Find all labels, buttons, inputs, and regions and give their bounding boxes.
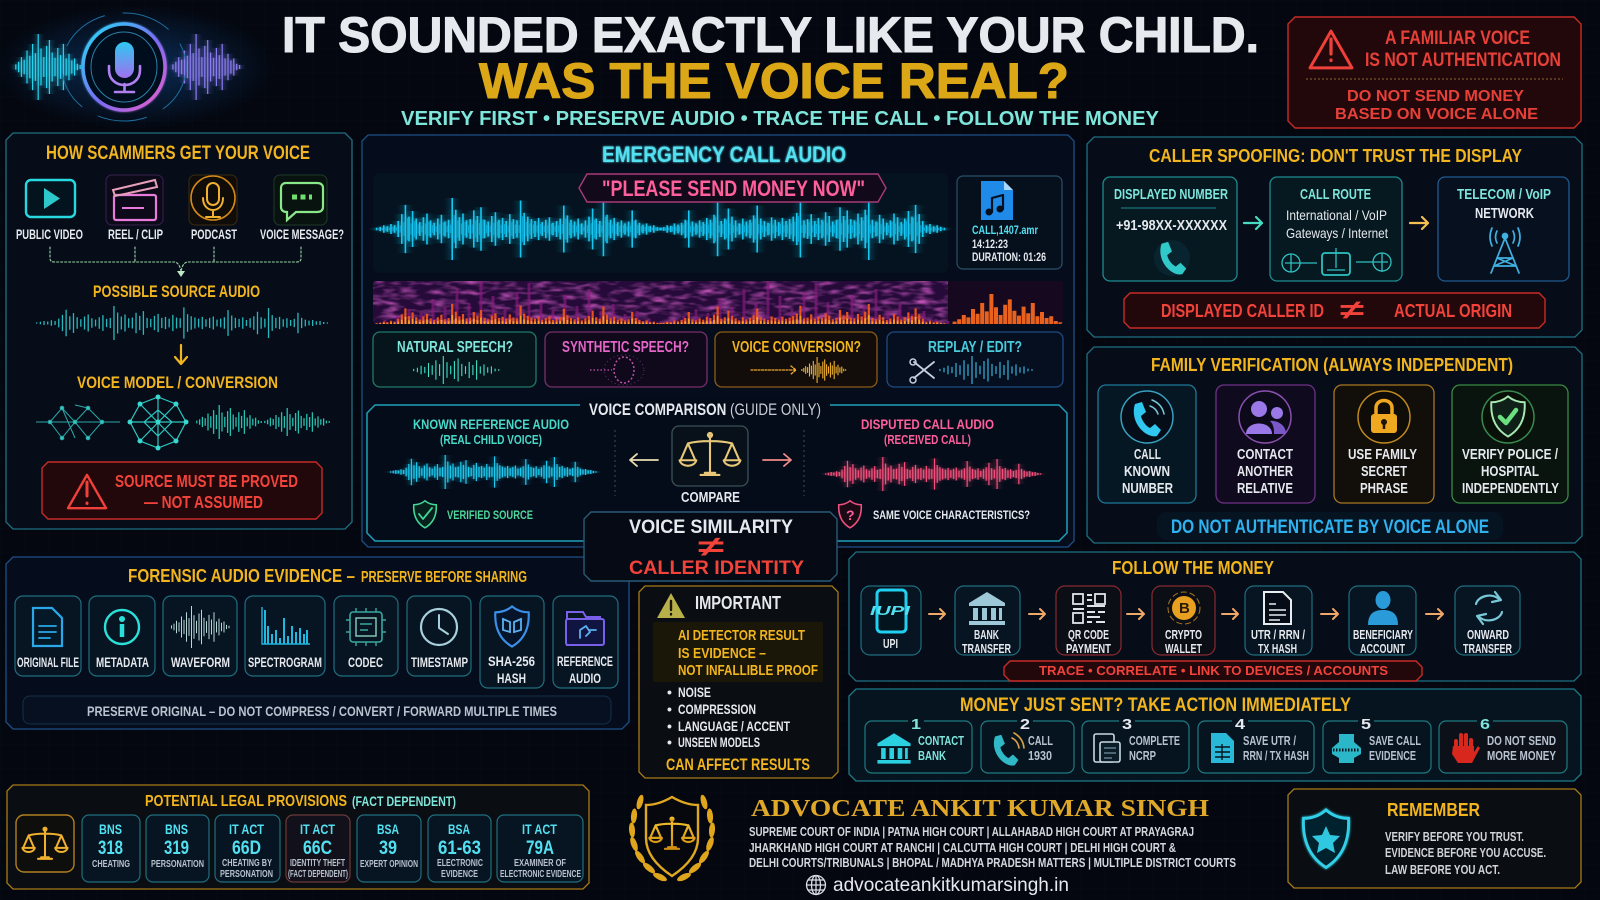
card: BNS 319: 319 [164,838,189,859]
step: crypto wallet [1152,586,1215,656]
warning text: DO NOT SEND MONEY [1347,88,1524,105]
card: spectrogram [245,596,325,676]
maxims [1385,830,1546,877]
card: reference audio: AUDIO [569,670,601,686]
label: possible source audio: POSSIBLE SOURCE AUDIO [93,283,260,301]
name: ADVOCATE ANKIT KUMAR SINGH [751,796,1209,822]
converted waveform tail [265,408,329,436]
card: waveform [163,596,237,676]
warning text: A FAMILIAR VOICE [1385,28,1530,49]
card: IT Act 66D: PERSONATION [220,869,273,880]
icon: neural network chain [36,405,120,440]
card: telecom network [1438,177,1569,281]
step: UPI [861,586,921,655]
known reference label [413,416,569,447]
factors list: UNSEEN MODELS [678,734,760,750]
same voice characteristics [839,501,1030,528]
step: QR code: QR CODE [1068,627,1109,642]
warning mark [86,482,88,504]
banner: do not authenticate: DO NOT AUTHENTICATE BY VOICE ALONE [1171,517,1489,538]
action 5: save call evidence: EVIDENCE [1369,748,1416,763]
card: BSA 61-63 [428,815,491,882]
step: onward transfer: TRANSFER [1463,641,1512,656]
card: call route: International / VoIP [1286,207,1387,223]
card: contact another relative: RELATIVE [1237,481,1293,497]
card: reference audio [553,596,618,688]
heading text: VOICE COMPARISON (GUIDE ONLY) [589,401,821,419]
quote pill: "PLEASE SEND MONEY NOW" [602,176,865,201]
factors list: • [667,718,672,734]
card: call known number: KNOWN [1124,464,1170,480]
heading: CALLER SPOOFING: DON'T TRUST THE DISPLAY [1149,145,1523,166]
arrow: left [630,454,658,466]
arrow [1426,609,1443,619]
action 1: contact bank: 1 [911,716,921,733]
panel: how scammers get your voice [6,133,352,529]
card: IT Act 66D: IT ACT [229,821,264,837]
step: crypto wallet: B [1179,600,1190,617]
source labels: PUBLIC VIDEO [16,226,83,242]
factors list: COMPRESSION [678,701,756,717]
card: reference audio: REFERENCE [557,653,613,669]
action 5: save call evidence: SAVE CALL [1369,733,1421,748]
card: natural speech: NATURAL SPEECH? [397,339,513,356]
card: displayed number: +91-98XX-XXXXXX [1116,217,1227,234]
action 6: do not send more [1439,716,1567,773]
chart: source waveform [37,306,327,340]
advocate emblem [628,794,716,883]
card: family secret phrase: SECRET [1361,464,1407,480]
card: verify independently: INDEPENDENTLY [1462,481,1559,497]
action 3: complete NCRP: COMPLETE [1129,733,1180,748]
maxims: VERIFY BEFORE YOU TRUST. [1385,830,1524,844]
banner: preserve original: PRESERVE ORIGINAL – DO NOT COMPRESS / CONVERT / FORWARD MULTIPLE TIMES [87,703,557,719]
warning text [1335,28,1561,123]
card: voice conversion [715,332,877,387]
chart: spectrogram [373,281,1063,324]
known reference label: KNOWN REFERENCE AUDIO [413,416,569,432]
factors list: • [667,734,672,750]
card: telecom network: TELECOM / VoIP [1457,187,1551,203]
card: BNS 319: PERSONATION [151,859,204,870]
panel: emergency call audio [362,135,1074,547]
callout: familiar voice warning [1288,17,1581,128]
arrowhead [177,271,185,277]
card: original file: ORIGINAL FILE [17,655,79,670]
chart: main waveform [373,173,948,273]
card: timestamp [407,596,471,676]
source labels [16,226,344,242]
card: family secret phrase: PHRASE [1360,481,1408,497]
card: BNS 319 [146,815,209,882]
title [282,7,1259,130]
icon: globe [806,876,826,894]
card: BSA 39: BSA [377,821,399,837]
card: BSA 61-63: ELECTRONIC [437,858,483,869]
step: UTR RRN TX hash [1245,586,1312,656]
card: synthetic speech [545,332,707,387]
step: bank transfer [955,586,1020,656]
heading: IMPORTANT [695,593,781,613]
action 3: complete NCRP: 3 [1122,716,1132,733]
card: BSA 61-63: 61-63 [438,838,481,859]
divider [615,430,804,496]
card: voice conversion: VOICE CONVERSION? [732,339,861,356]
heading [580,398,830,420]
action 6: do not send more: 6 [1480,716,1490,733]
card: call route: CALL ROUTE [1300,187,1371,203]
card: call route: Gateways / Internet [1286,225,1388,241]
step: bank transfer: BANK [974,627,999,642]
AI detector note: AI DETECTOR RESULT [678,627,805,644]
card: verify independently [1452,385,1568,503]
icon: legal scale [16,815,74,872]
callout: displayed id vs actual origin [1124,293,1545,328]
step: beneficiary account: BENEFICIARY [1353,627,1413,642]
card: BSA 39: 39 [379,838,397,859]
card: codec [334,596,398,676]
card: call known number [1098,385,1196,503]
courts: SUPREME COURT OF INDIA | PATNA HIGH COURT | ALLAHABAD HIGH COURT AT PRAYAGRAJ [749,825,1194,839]
arrow: to route [1244,217,1262,229]
card: verify independently: HOSPITAL [1481,464,1539,480]
card: displayed number [1103,177,1237,281]
panel: money just sent [849,689,1581,781]
action 1: contact bank [865,716,972,773]
step: bank transfer: TRANSFER [962,641,1011,656]
known reference label: (REAL CHILD VOICE) [440,433,542,447]
arrow: down [175,345,187,364]
icon: star shield [1303,810,1349,867]
card: replay edit: REPLAY / EDIT? [928,339,1022,356]
callout text: SOURCE MUST BE PROVED [115,471,298,491]
card: contact another relative: CONTACT [1237,447,1293,463]
card: sha-256 hash: SHA-256 [488,653,535,669]
chart: converted waveform [197,405,261,439]
subheading: PRESERVE BEFORE SHARING [361,569,527,586]
card: call known number: NUMBER [1122,481,1173,497]
panel: forensic audio evidence [6,557,629,729]
icon: audio file [981,181,1013,220]
action 2: call 1930: 1930 [1028,748,1052,763]
arrow [929,609,945,619]
chart: known waveform [391,455,596,489]
logo: microphone with waveform [0,5,275,129]
connector: sources merge [50,247,301,275]
step: UTR RRN TX hash: UTR / RRN / [1251,627,1305,642]
card: BSA 39: EXPERT OPINION [360,859,418,870]
icon: warning [657,593,685,618]
action 4: save UTR: SAVE UTR / [1243,733,1296,748]
banner: do not authenticate [1157,512,1503,540]
arrow [1321,609,1338,619]
file info card: 14:12:23 [972,239,1008,251]
card: codec: CODEC [348,655,383,670]
title line 1: IT SOUNDED EXACTLY LIKE YOUR CHILD. [282,7,1259,63]
card: family secret phrase [1334,385,1434,503]
icon: neural sphere [128,394,188,450]
callout: voice similarity is not caller identity [584,512,837,581]
factors list: LANGUAGE / ACCENT [678,718,790,734]
step: UTR RRN TX hash: TX HASH [1258,641,1297,656]
action 2: call 1930: 2 [1020,716,1030,733]
icon: warning triangle [68,475,106,508]
action 5: save call evidence [1323,716,1431,773]
source labels: REEL / CLIP [108,226,163,242]
callout: displayed id vs actual origin: ≠ [1340,295,1364,325]
card: IT Act 66C: (FACT DEPENDENT) [288,869,348,880]
same voice characteristics: ? [846,507,855,523]
same voice characteristics: SAME VOICE CHARACTERISTICS? [873,508,1030,522]
warning text: IS NOT AUTHENTICATION [1365,50,1561,71]
chart: disputed waveform [826,457,1041,491]
card: call known number: CALL [1134,447,1161,463]
card: spectrogram: SPECTROGRAM [248,655,322,670]
card: IT Act 66D: 66D [232,838,261,859]
card: call route [1270,177,1402,281]
compare label: COMPARE [681,490,740,506]
action 4: save UTR: 4 [1235,716,1246,733]
disputed label: (RECEIVED CALL) [884,433,971,447]
card: BSA 61-63: BSA [448,821,470,837]
card: IT Act 79A: EXAMINER OF [514,858,566,869]
card: IT Act 79A [497,815,583,882]
arrow: to network [1410,217,1428,229]
AI detector note: NOT INFALLIBLE PROOF [678,662,818,679]
step: QR code: PAYMENT [1066,641,1111,656]
file info card [957,176,1062,269]
action 1: contact bank: BANK [918,748,946,763]
card: BSA 61-63: EVIDENCE [441,869,478,880]
panel: family verification [1087,347,1582,543]
heading: EMERGENCY CALL AUDIO [602,142,846,167]
card: family secret phrase: USE FAMILY [1348,447,1417,463]
action 1: contact bank: CONTACT [918,733,964,748]
callout: source must be proved [42,462,322,519]
banner: preserve original [23,696,611,724]
card: IT Act 79A: IT ACT [522,821,557,837]
title line 2: WAS THE VOICE REAL? [479,53,1069,109]
panel: important [639,586,838,778]
card: contact another relative [1216,385,1315,503]
icon: reel clip [106,175,163,225]
card: waveform: WAVEFORM [171,655,230,670]
step: onward transfer [1455,586,1520,656]
AI detector note: IS EVIDENCE – [678,645,766,662]
icon: public video [26,180,75,217]
file info card: CALL,1407.amr [972,225,1038,237]
conclusion: CAN AFFECT RESULTS [666,756,810,774]
callout: displayed id vs actual origin: ACTUAL ORIGIN [1394,301,1512,321]
heading: REMEMBER [1387,800,1480,820]
panel: voice comparison [367,398,1067,541]
step: onward transfer: ONWARD [1467,627,1509,642]
heading: FAMILY VERIFICATION (ALWAYS INDEPENDENT) [1151,354,1513,375]
card: IT Act 66C [286,815,350,882]
card: contact another relative: ANOTHER [1237,464,1293,480]
banner: trace correlate link: TRACE • CORRELATE • LINK TO DEVICES / ACCOUNTS [1039,664,1388,678]
card: BNS 318: CHEATING [92,859,130,870]
card: displayed number: DISPLAYED NUMBER [1114,187,1228,203]
heading: FORENSIC AUDIO EVIDENCE – [128,565,355,586]
panel: remember [1288,789,1581,888]
action 4: save UTR [1198,716,1314,773]
arrow: right [763,454,791,466]
card: IT Act 66D: CHEATING BY [222,858,272,869]
card: metadata: METADATA [96,655,149,670]
action 6: do not send more: DO NOT SEND [1487,733,1556,748]
courts: DELHI COURTS/TRIBUNALS | BHOPAL / MADHYA PRADESH MATTERS | MULTIPLE DISTRICT COURTS [749,856,1236,870]
panel: potential legal provisions [7,785,589,889]
heading: MONEY JUST SENT? TAKE ACTION IMMEDIATELY [960,695,1351,716]
card: telecom network: NETWORK [1475,206,1534,222]
source labels: VOICE MESSAGE? [260,226,344,242]
card: sha-256 hash [480,596,544,688]
card: natural speech [373,332,536,387]
card: BSA 39 [357,815,421,882]
heading: FOLLOW THE MONEY [1112,557,1275,578]
card: BNS 318: BNS [99,821,122,837]
action 3: complete NCRP: NCRP [1129,748,1156,763]
icon: compare scale [672,426,748,486]
icon: podcast [189,175,237,225]
label: voice model: VOICE MODEL / CONVERSION [77,374,278,392]
panel: caller spoofing [1087,137,1582,337]
card: original file [15,596,81,676]
card: replay edit [887,332,1063,387]
warning exclamation [1329,39,1333,60]
arrow [1127,609,1144,619]
action 3: complete NCRP [1082,716,1189,773]
action 5: save call evidence: 5 [1361,716,1371,733]
callout: displayed id vs actual origin: DISPLAYED CALLER ID [1161,301,1324,321]
icon: warning triangle [1310,31,1352,68]
card: IT Act 79A: ELECTRONIC EVIDENCE [500,869,581,880]
step: beneficiary account: ACCOUNT [1360,641,1405,656]
factors list: NOISE [678,684,711,700]
disputed label [861,416,994,447]
subtitle: VERIFY FIRST • PRESERVE AUDIO • TRACE THE CALL • FOLLOW THE MONEY [401,108,1160,130]
step: beneficiary account [1349,586,1416,656]
heading: HOW SCAMMERS GET YOUR VOICE [46,143,310,164]
factors list [667,684,790,750]
card: IT Act 66C: 66C [303,838,332,859]
card: verify independently: VERIFY POLICE / [1462,447,1558,463]
card: synthetic speech: SYNTHETIC SPEECH? [562,339,689,356]
callout: voice similarity is not caller identity: ≠ [698,531,724,562]
icon: voice message [274,175,327,225]
arrow [1029,609,1045,619]
courts: JHARKHAND HIGH COURT AT RANCHI | CALCUTTA HIGH COURT | DELHI HIGH COURT & [749,841,1176,855]
callout: voice similarity is not caller identity: CALLER IDENTITY [629,557,804,579]
action 6: do not send more: MORE MONEY [1487,748,1556,763]
card: sha-256 hash: HASH [497,670,526,686]
source labels: PODCAST [191,226,237,242]
warning text: BASED ON VOICE ALONE [1335,106,1538,123]
step: UPI: UPI [883,636,898,651]
action 2: call 1930: CALL [1028,733,1053,748]
step: crypto wallet: WALLET [1165,641,1202,656]
panel: follow the money [849,552,1581,681]
step: UPI: IUPI [870,603,911,618]
AI detector note [678,627,818,679]
card: BNS 318: 318 [98,838,123,859]
card: BNS 319: BNS [165,821,188,837]
heading: POTENTIAL LEGAL PROVISIONS [145,793,347,810]
website: advocateankitkumarsingh.in [833,874,1069,896]
advocate details [749,796,1236,896]
card: timestamp: TIMESTAMP [411,655,468,670]
card: BNS 318 [82,815,140,882]
maxims: LAW BEFORE YOU ACT. [1385,863,1500,877]
maxims: EVIDENCE BEFORE YOU ACCUSE. [1385,846,1546,860]
verified source [414,501,533,528]
file info card: DURATION: 01:26 [972,252,1046,264]
courts [749,825,1236,870]
action 2: call 1930 [981,716,1074,773]
banner: trace correlate link [1004,661,1422,681]
action 4: save UTR: RRN / TX HASH [1243,748,1309,763]
step: crypto wallet: CRYPTO [1165,627,1202,642]
disputed label: DISPUTED CALL AUDIO [861,416,994,432]
card: metadata [89,596,155,676]
step: QR code [1056,586,1121,656]
callout text [115,471,298,512]
card: IT Act 66C: IT ACT [300,821,335,837]
callout text: — NOT ASSUMED [144,492,263,512]
card: IT Act 66D [215,815,280,882]
arrow [1222,609,1238,619]
verified source: VERIFIED SOURCE [447,508,533,522]
card: IT Act 79A: 79A [526,838,554,859]
heading note: (FACT DEPENDENT) [352,793,456,809]
card: IT Act 66C: IDENTITY THEFT [290,858,345,869]
callout: voice similarity is not caller identity: VOICE SIMILARITY [629,516,793,538]
factors list: • [667,701,672,717]
factors list: • [667,684,672,700]
